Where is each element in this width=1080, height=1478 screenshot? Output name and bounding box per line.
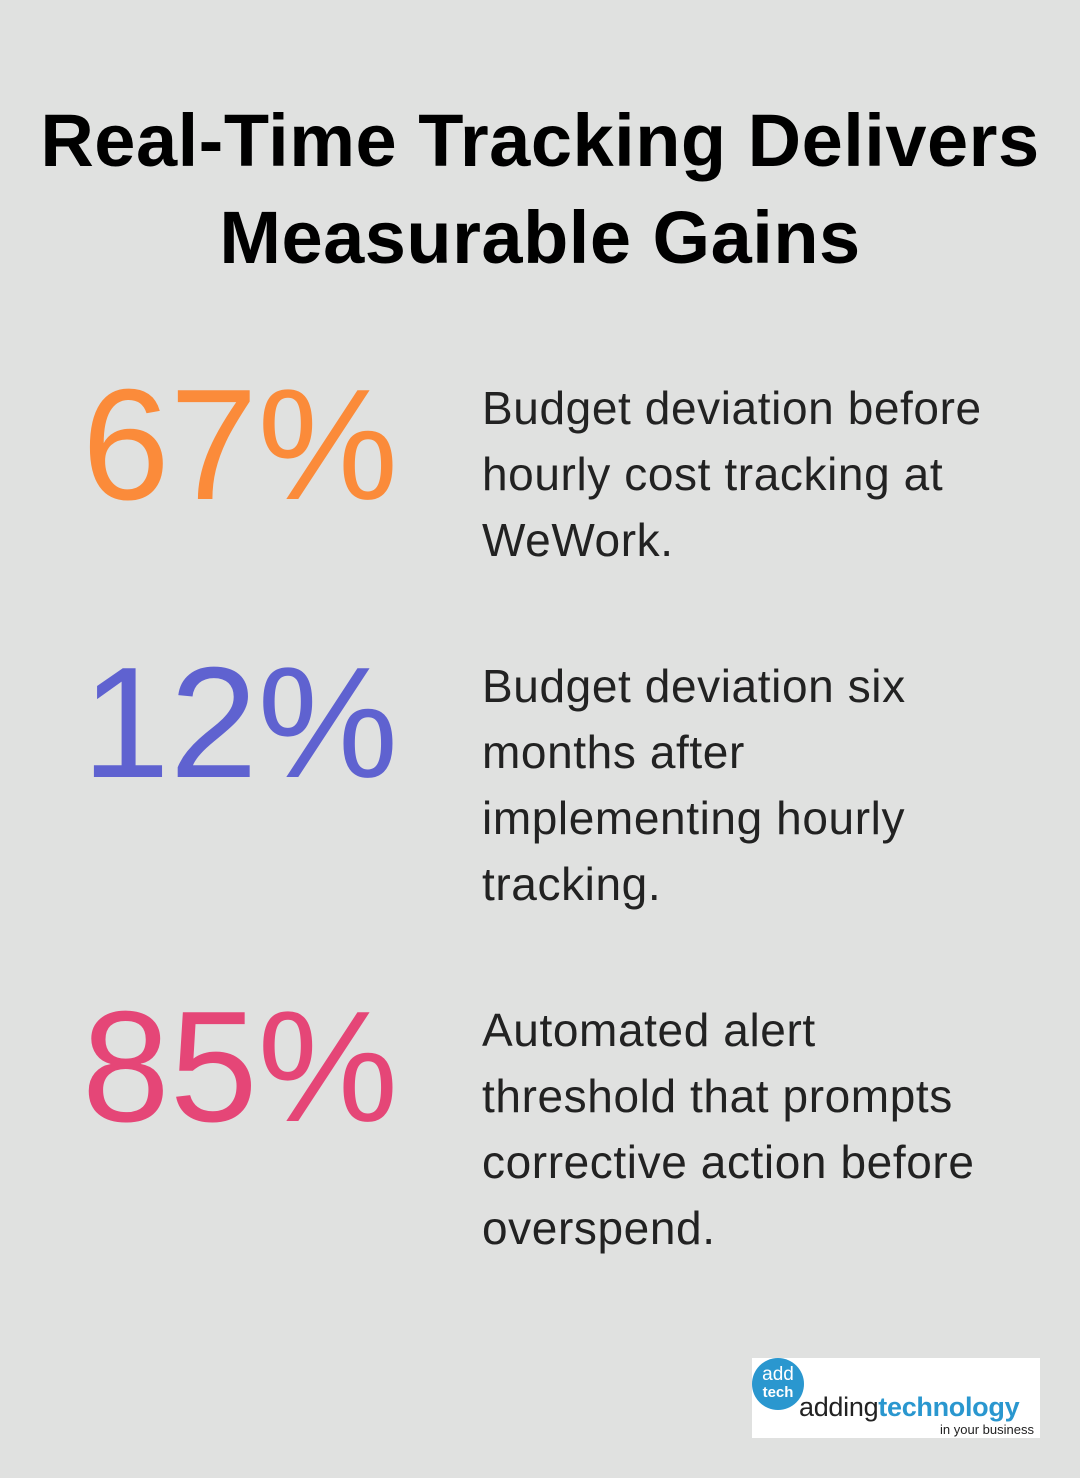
description 3: overspend.: [482, 1202, 716, 1254]
stat 2: [82, 635, 906, 910]
description 2: months after: [482, 726, 745, 778]
stat 1: [82, 357, 982, 566]
description 2: implementing hourly: [482, 792, 905, 844]
description 2: tracking.: [482, 858, 661, 910]
description 1: Budget deviation before: [482, 382, 982, 434]
title: Measurable Gains: [219, 196, 861, 279]
description 3: [482, 1004, 975, 1254]
title: [40, 99, 1040, 279]
description 3: threshold that prompts: [482, 1070, 953, 1122]
number 67%: 67%: [82, 357, 398, 533]
logo circle: add: [762, 1364, 794, 1385]
number 85%: 85%: [82, 979, 398, 1155]
description 1: hourly cost tracking at: [482, 448, 943, 500]
logo: [752, 1358, 1040, 1438]
logo text: addingtechnology: [799, 1392, 1019, 1422]
description 2: Budget deviation six: [482, 660, 906, 712]
logo: in your business: [940, 1422, 1034, 1437]
logo circle: [752, 1358, 804, 1410]
logo circle: tech: [763, 1384, 793, 1401]
description 1: [482, 382, 982, 566]
stat 3: [82, 979, 975, 1254]
description 3: corrective action before: [482, 1136, 975, 1188]
title: Real-Time Tracking Delivers: [40, 99, 1040, 182]
description 1: WeWork.: [482, 514, 674, 566]
description 3: Automated alert: [482, 1004, 816, 1056]
number 12%: 12%: [82, 635, 398, 811]
description 2: [482, 660, 906, 910]
